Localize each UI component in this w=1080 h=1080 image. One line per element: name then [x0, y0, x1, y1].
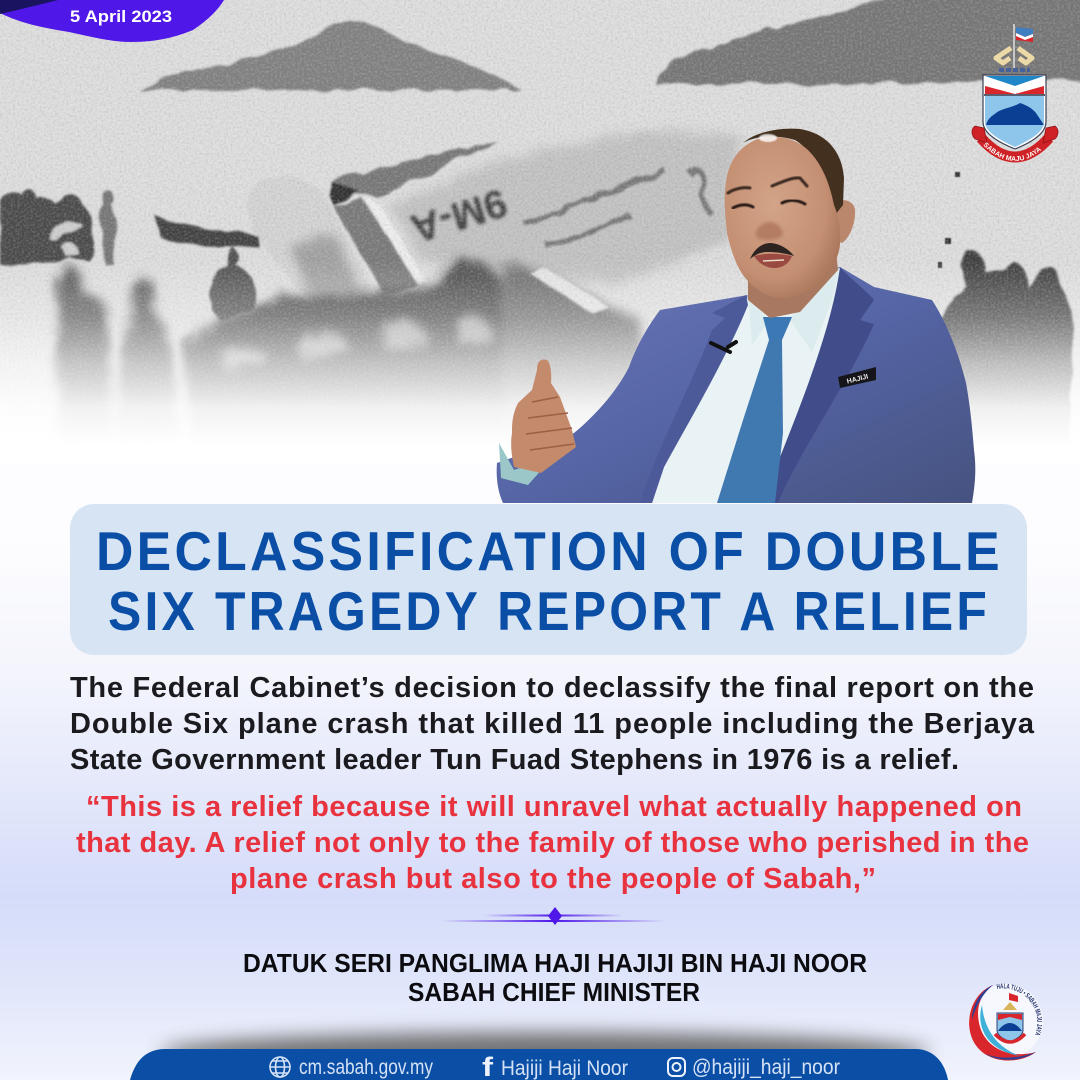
small ribbon: [995, 1034, 1025, 1042]
title line 1: DECLASSIFICATION OF DOUBLE: [96, 520, 1003, 582]
facebook text: Hajiji Haji Noor: [501, 1057, 628, 1080]
people group right: [938, 251, 1072, 450]
crescent navy and red: [969, 985, 1036, 1061]
microphone: [711, 342, 736, 352]
plane fuselage: [390, 130, 740, 285]
footer shadow: [160, 1032, 930, 1072]
flag: [1014, 24, 1033, 68]
globe icon: [270, 1057, 290, 1077]
people group left: [0, 190, 93, 265]
finger lines: [526, 397, 574, 450]
crowd foreground left: [56, 265, 115, 450]
date text: 5 April 2023: [70, 7, 172, 26]
dark navy corner: [0, 0, 58, 14]
left lapel: [640, 295, 748, 503]
ring text: HALA TUJU • SABAH MAJU JAYA: [996, 984, 1042, 1035]
title panel: [70, 504, 1027, 655]
website text: cm.sabah.gov.my: [299, 1056, 433, 1079]
forehead shine: [759, 134, 777, 142]
white fade at the bottom of photo: [0, 260, 1080, 465]
photo specks: [938, 172, 960, 268]
right lapel: [762, 267, 874, 503]
round Hala Tuju logo: [969, 984, 1043, 1060]
red quote: that day. A relief not only to the family of those who perished in the: [76, 827, 1029, 859]
red quote: “This is a relief because it will unravel what actually happened on: [86, 791, 1022, 823]
brows: [728, 178, 807, 193]
footer band: [130, 1049, 948, 1080]
head: [725, 137, 840, 298]
portrait of the Chief Minister: [497, 129, 975, 503]
name tag: [838, 367, 876, 388]
small shield: [997, 1013, 1023, 1042]
nose: [756, 222, 783, 240]
crowd mottling: [220, 315, 495, 370]
mouth: [754, 254, 792, 268]
speaker name and title: DATUK SERI PANGLIMA HAJI HAJIJI BIN HAJI NOOR: [243, 948, 867, 978]
red motto ribbon: [972, 126, 1058, 157]
person under tail: [211, 247, 254, 322]
film grain light: [0, 0, 1080, 460]
neck: [748, 240, 838, 318]
red quote: plane crash but also to the people of Sabah,”: [230, 863, 876, 895]
small crest: [995, 993, 1025, 1042]
instagram text: @hajiji_haji_noor: [692, 1056, 840, 1079]
film grain dark: [0, 0, 1080, 460]
footer contact bar: [130, 1049, 948, 1080]
island right: [655, 0, 1080, 84]
fin wedge: [330, 180, 360, 204]
light patches in group: [48, 221, 82, 256]
crowd mid right: [500, 265, 650, 450]
registration lettering: 9M-A: [406, 180, 512, 251]
intro paragraph: The Federal Cabinet’s decision to declassify the final report on the: [70, 672, 1034, 704]
hand: [511, 359, 576, 473]
shirt: [652, 268, 840, 503]
date banner: [0, 0, 224, 42]
crowd person two: [115, 278, 180, 450]
eyes: [733, 200, 805, 208]
crescent blue edge: [972, 985, 1036, 1060]
motto text: SABAH MAJU JAYA: [984, 142, 1042, 162]
teeth: [763, 260, 784, 261]
shield: [983, 75, 1046, 149]
tailplane: [155, 216, 258, 247]
small flag: [1009, 993, 1018, 1002]
red quote: [76, 791, 1029, 895]
ear: [834, 200, 855, 243]
speaker name and title: SABAH CHIEF MINISTER: [408, 977, 700, 1007]
person standing left: [101, 190, 116, 265]
light streak near wreck: [530, 268, 606, 315]
name tag: HAJIJI: [846, 374, 869, 386]
suit jacket: [497, 267, 975, 503]
intro paragraph: State Government leader Tun Fuad Stephens in 1976 is a relief.: [70, 744, 959, 776]
small gold arms: [1003, 1002, 1017, 1010]
intro paragraph: Double Six plane crash that killed 11 people including the Berjaya: [70, 708, 1035, 740]
Sabah state coat of arms: [972, 24, 1058, 162]
island left: [138, 21, 522, 90]
tie: [717, 340, 783, 503]
ornament divider: [442, 907, 664, 925]
tie knot: [763, 317, 792, 340]
cuff: [499, 443, 553, 485]
moustache: [750, 243, 794, 259]
gold crest arms: [996, 48, 1032, 63]
purple date wave: [0, 0, 224, 42]
wreckage crowd: [183, 260, 535, 450]
hair: [743, 129, 844, 215]
collar: [748, 268, 840, 352]
plane fin dark strip: [331, 140, 497, 198]
intro paragraph: [70, 672, 1035, 776]
plane marks: [525, 170, 712, 245]
crest base: [999, 68, 1030, 72]
background photo: plane crash scene: [0, 0, 1080, 465]
title background: [70, 504, 1027, 655]
instagram icon: [668, 1058, 685, 1076]
crescent cyan inner: [980, 1005, 1020, 1056]
rudder stripes: [332, 198, 420, 295]
title line 2: SIX TRAGEDY REPORT A RELIEF: [108, 580, 990, 642]
speaker name and title: [243, 948, 867, 1007]
